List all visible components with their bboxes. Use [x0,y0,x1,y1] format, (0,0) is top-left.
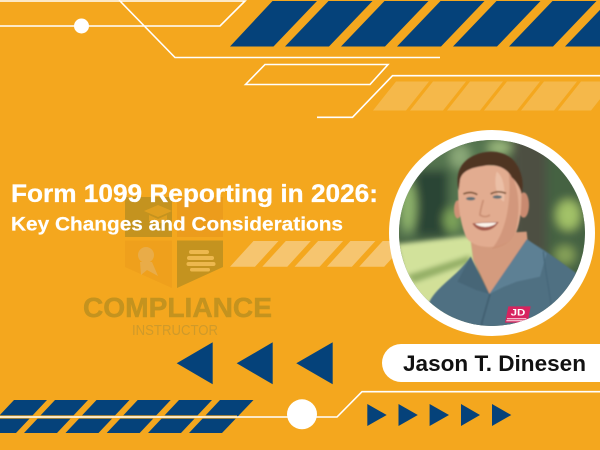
shirt logo badge [505,306,531,323]
light stripe band upper right [373,82,600,110]
ears [454,200,461,218]
smile [472,222,499,231]
logo shield bottom-right panel [177,240,223,288]
logo shield bottom-left panel [125,240,172,288]
outlined parallelogram [246,64,388,84]
light stripes beside logo [230,241,408,267]
eyes [466,197,475,200]
speaker name: Jason T. Dinesen [403,351,586,376]
nose shadow [480,200,490,217]
top navy stripe band [230,1,600,46]
shirt logo badge: JD [511,308,526,318]
bottom navy stripe band [0,400,254,433]
speaker portrait [389,130,595,336]
upper right circuit line [317,76,600,117]
hair [458,152,523,194]
logo shield top-left panel [125,197,172,237]
title line 1: Form 1099 Reporting in 2026: [11,180,378,208]
left-pointing navy arrows [177,342,333,384]
face [458,165,521,247]
shirt [429,239,577,333]
speaker name pill [382,344,600,382]
title [11,180,378,236]
neck [470,232,528,295]
logo sub-wordmark: INSTRUCTOR [132,323,218,339]
right-pointing navy arrows [367,404,511,426]
logo wordmark: COMPLIANCE [83,292,272,323]
top circuit lines with node [0,0,440,58]
logo shield top-right panel [177,197,223,237]
title line 2: Key Changes and Considerations [11,214,343,236]
watermark logo: Compliance Instructor [83,197,272,339]
bottom circuit line with node [0,392,600,429]
